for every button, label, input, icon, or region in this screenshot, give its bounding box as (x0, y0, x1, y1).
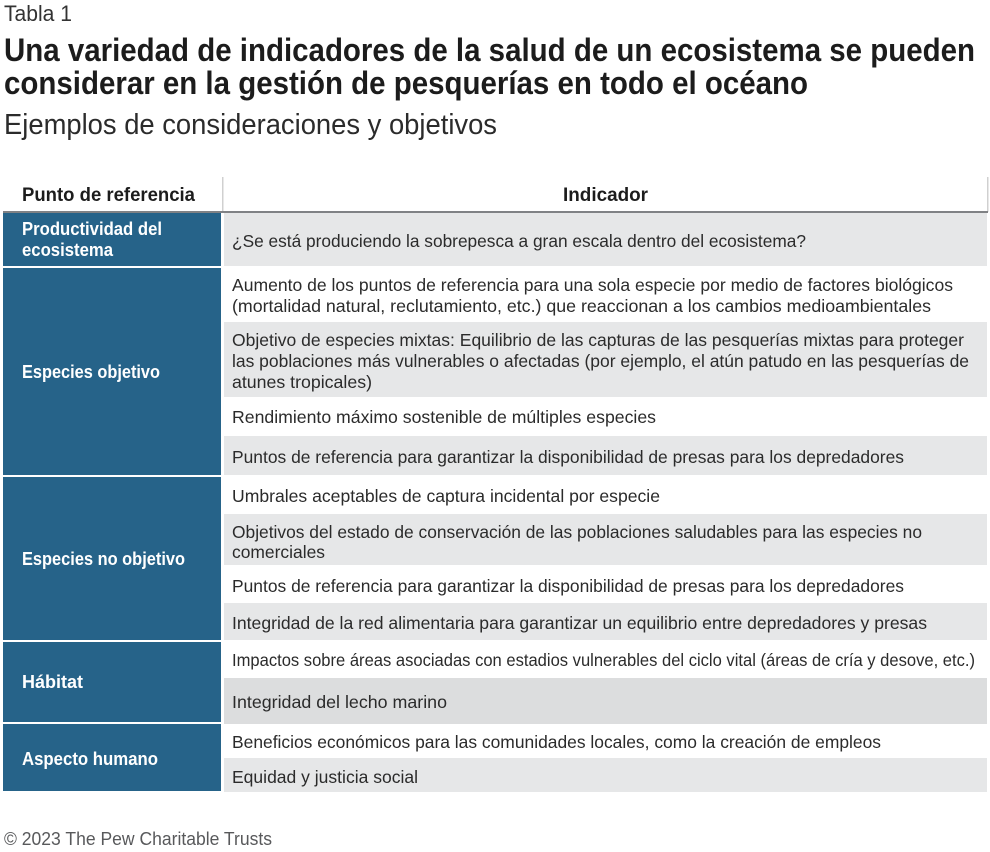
indicator row: mixed species: las poblaciones más vulnerables o afectadas (por ejemplo, el atún patudo en las pesquerías de (232, 351, 969, 371)
indicator row: mixed species: Objetivo de especies mixtas: Equilibrio de las capturas de las pesquerías mixtas para proteger (232, 330, 964, 350)
title (4, 32, 975, 101)
category cell: Especies objetivo: Especies objetivo (22, 362, 160, 382)
table header (3, 177, 988, 213)
category cell: Hábitat (3, 642, 221, 722)
title: considerar en la gestión de pesquerías en todo el océano (4, 65, 808, 101)
table header: Punto de referencia (22, 185, 195, 206)
category cell: Hábitat: Hábitat (22, 672, 83, 692)
subtitle: Ejemplos de consideraciones y objetivos (4, 109, 497, 141)
indicator row: single species (232, 275, 953, 316)
category cell: Especies no objetivo: Especies no objetivo (22, 549, 185, 569)
category cell: Productividad del ecosistema (3, 213, 221, 266)
indicator row (224, 213, 987, 266)
row group: Hábitat (3, 642, 987, 724)
table header: Indicador (563, 185, 649, 206)
indicator row: conservation objectives: comerciales (232, 542, 325, 562)
category cell: Especies no objetivo (3, 477, 221, 640)
category cell: Especies objetivo (3, 268, 221, 475)
row group: Especies no objetivo (3, 477, 987, 640)
indicator row: conservation objectives (224, 514, 987, 565)
copyright: © 2023 The Pew Charitable Trusts (4, 829, 272, 849)
indicator row: ¿Se está produciendo la sobrepesca a gran escala dentro del ecosistema? (232, 231, 806, 251)
indicator row: mixed species (224, 322, 987, 397)
indicator row: prey availability (224, 436, 987, 475)
row group: Productividad del ecosistema (3, 213, 987, 266)
indicator row: bycatch thresholds: Umbrales aceptables de captura incidental por especie (232, 486, 660, 506)
indicator row: prey availability: Puntos de referencia para garantizar la disponibilidad de presas para los depredadores (232, 576, 904, 596)
indicator row: mixed species: atunes tropicales) (232, 372, 372, 392)
indicator row: economic benefits: Beneficios económicos para las comunidades locales, como la creación de empleos (232, 732, 881, 752)
table label: Tabla 1 (4, 1, 72, 26)
indicator row: single species: (mortalidad natural, reclutamiento, etc.) que reaccionan a los cambios medioambientales (232, 296, 931, 316)
indicator row: single species: Aumento de los puntos de referencia para una sola especie por medio de factores biológicos (232, 275, 953, 295)
indicator row: seabed integrity (224, 678, 987, 724)
indicator row: multispecies yield: Rendimiento máximo sostenible de múltiples especies (232, 407, 656, 427)
indicator row: food web integrity: Integridad de la red alimentaria para garantizar un equilibrio entre depredadores y presas (232, 613, 927, 633)
indicator row: equity and justice (224, 758, 987, 792)
row group: Especies objetivo (3, 268, 987, 475)
indicator row: equity and justice: Equidad y justicia social (232, 767, 418, 787)
category cell: Productividad del ecosistema: ecosistema (22, 240, 114, 260)
indicator row: food web integrity (224, 603, 987, 640)
category cell: Productividad del ecosistema: Productividad del (22, 219, 162, 239)
indicator row: prey availability: Puntos de referencia para garantizar la disponibilidad de presas para los depredadores (232, 447, 904, 467)
indicator row: conservation objectives: Objetivos del estado de conservación de las poblaciones saludables para las especies no (232, 522, 922, 542)
indicator row: seabed integrity: Integridad del lecho marino (232, 692, 447, 712)
category cell: Aspecto humano (3, 724, 221, 791)
row group: Aspecto humano (3, 724, 987, 792)
category cell: Aspecto humano: Aspecto humano (22, 749, 158, 769)
